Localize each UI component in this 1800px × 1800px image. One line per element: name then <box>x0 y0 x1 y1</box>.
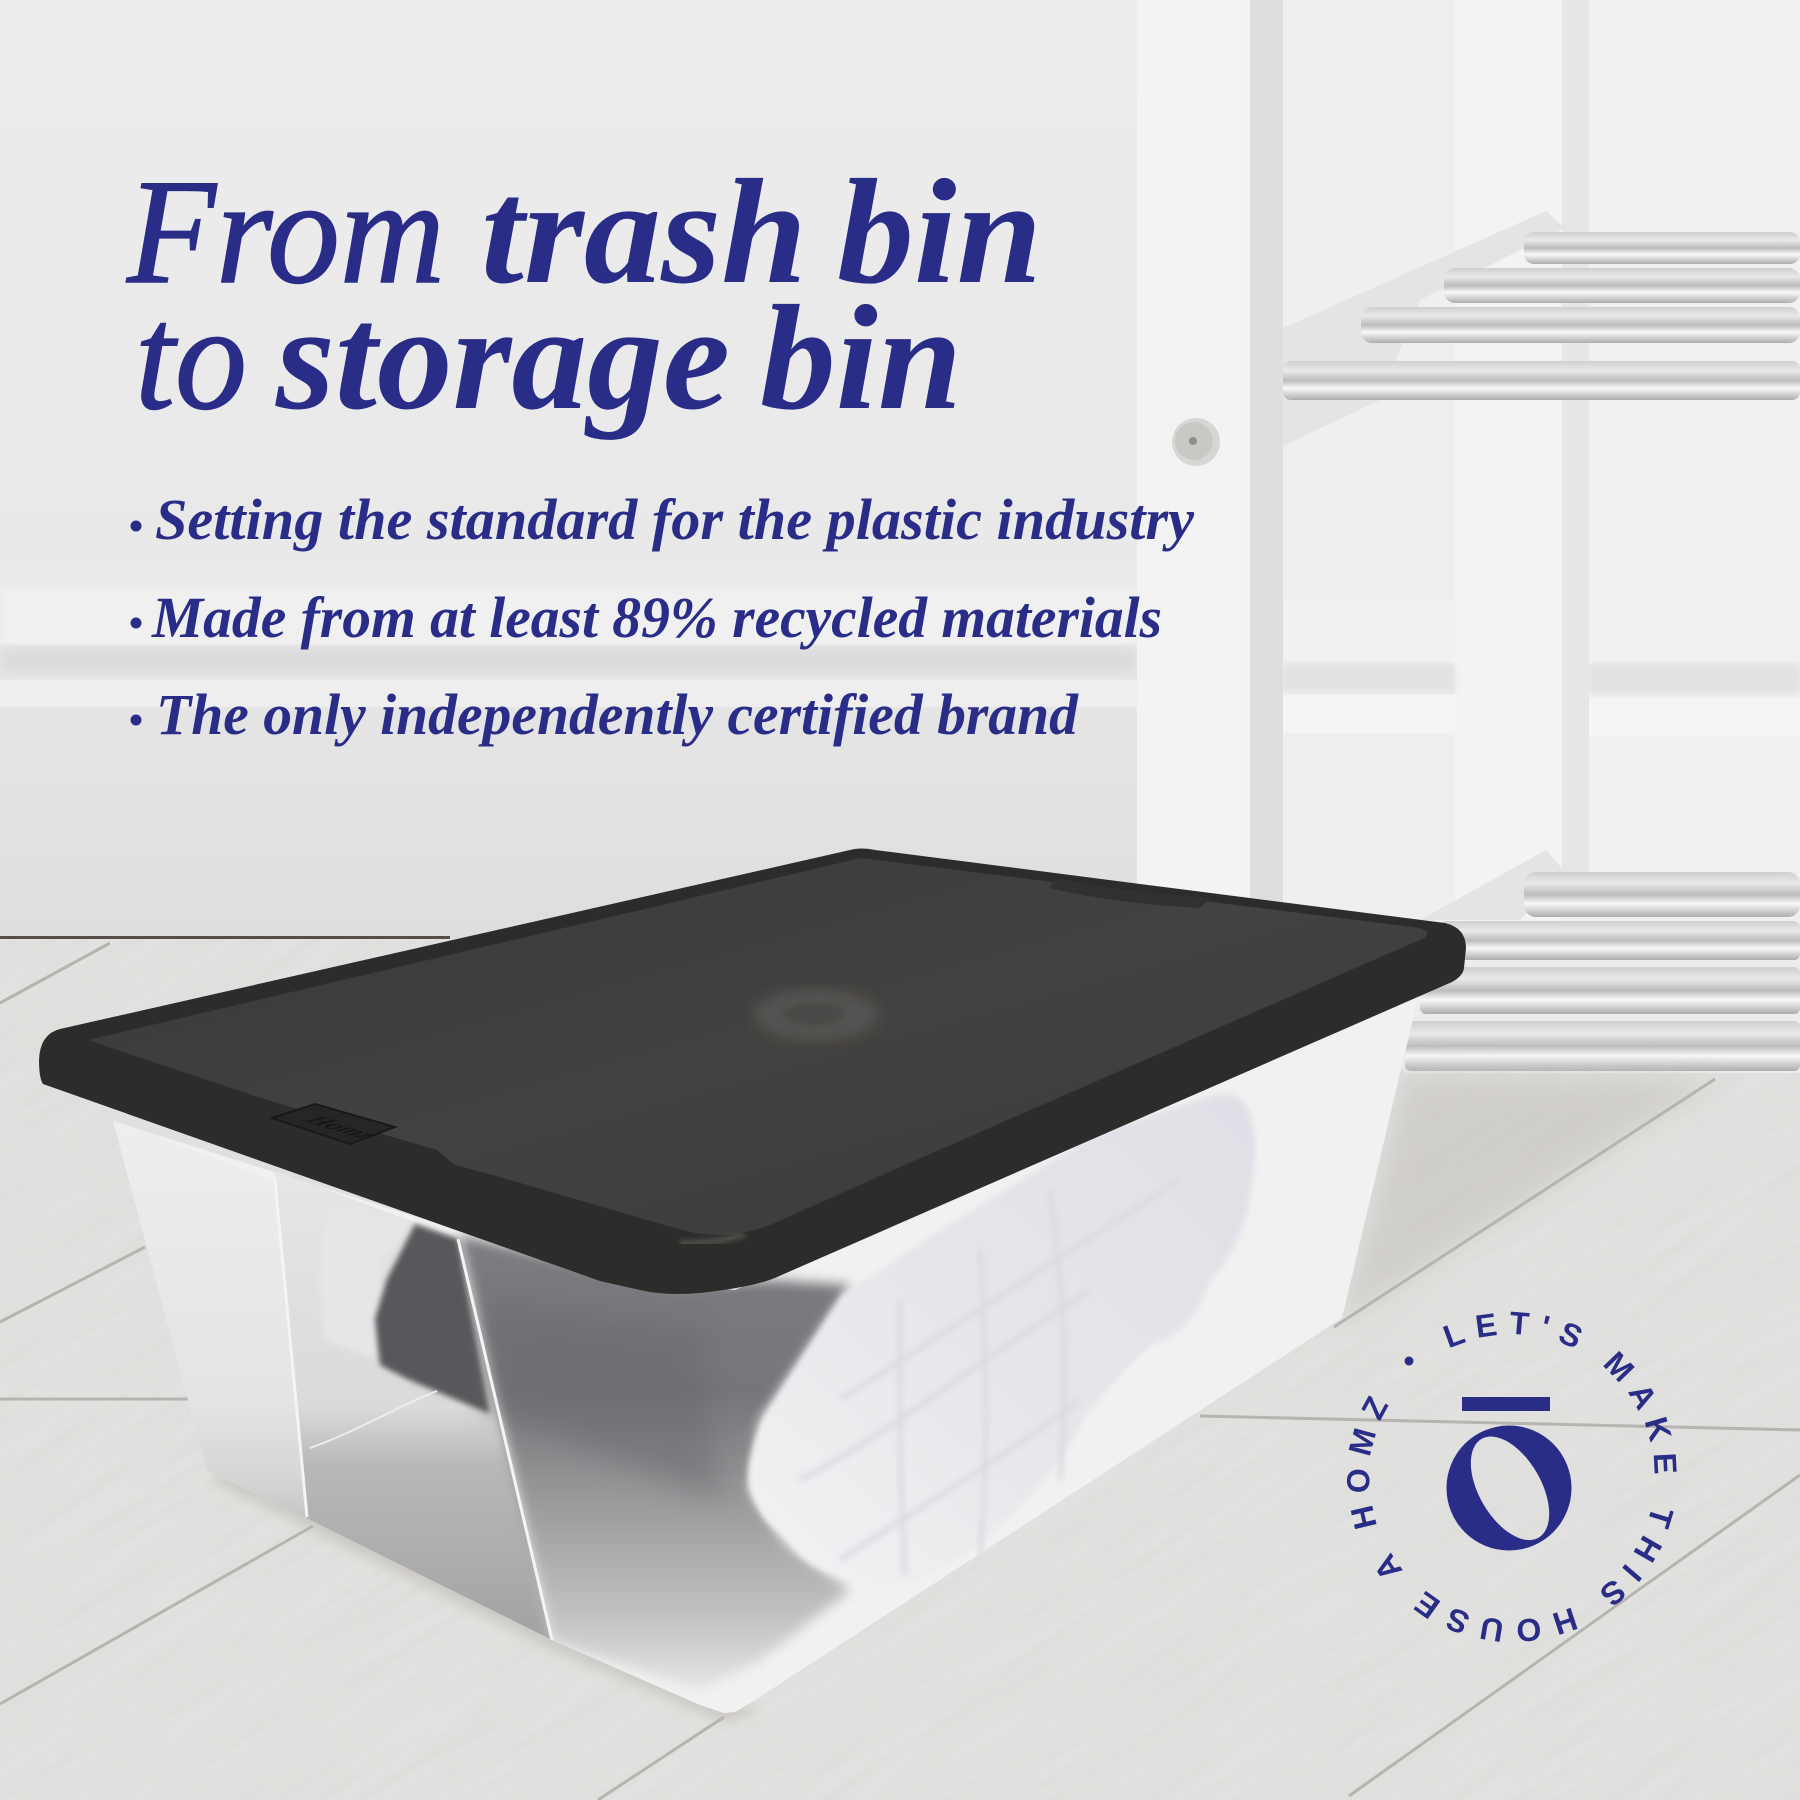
floor wood grain <box>0 939 1800 1800</box>
panel crease <box>310 1391 437 1448</box>
badge circular text: LET'S MAKE THIS HOUSE A HOMZ <box>1346 1312 1677 1642</box>
lid outer rim <box>39 848 1466 1294</box>
title line 2: bin <box>760 275 962 441</box>
front seam line <box>458 1239 552 1640</box>
title line 1 <box>126 149 1042 315</box>
upper shelf brackets and rails <box>1283 211 1800 446</box>
rail 3 <box>1361 307 1800 343</box>
title <box>126 149 1042 441</box>
door moulding <box>0 563 1137 707</box>
lower rail 4 <box>1405 1021 1800 1071</box>
white shoe heel <box>324 1290 375 1356</box>
lid top panel <box>88 858 1427 1235</box>
white shoe sole <box>748 1094 1255 1585</box>
left clear face <box>147 1243 306 1518</box>
wall moulding <box>1283 600 1800 736</box>
lower rail 1 <box>1524 872 1800 917</box>
wall screw <box>1172 418 1220 466</box>
shelf posts <box>1250 0 1589 905</box>
title line 2: storage <box>275 275 730 441</box>
background: white door <box>0 0 1800 945</box>
brand badge <box>1346 1312 1677 1642</box>
door stile <box>1137 0 1251 945</box>
storage bin <box>39 848 1466 1720</box>
shelf unit: back wall <box>1283 0 1800 945</box>
title line 1: trash <box>481 149 807 315</box>
floor shade wedge behind bin <box>1334 1075 1715 1327</box>
lid central hub <box>754 989 878 1041</box>
dark inner panel <box>459 1235 850 1690</box>
brand imprint: Homz <box>296 1113 385 1141</box>
bullet 3: The only independently certified brand <box>156 682 1079 747</box>
bullet 1: Setting the standard for the plastic industry <box>155 487 1194 552</box>
shoe upper shade <box>480 1300 720 1500</box>
wooden floor <box>0 936 1800 1800</box>
brand imprint <box>272 1104 395 1144</box>
door bottom shadow line <box>0 936 450 939</box>
bracket <box>1283 211 1565 446</box>
lower shelf brackets and rails <box>1405 850 1800 1071</box>
lid corner highlight <box>680 1234 745 1243</box>
dark shoe <box>375 1224 490 1414</box>
badge logo ring <box>1447 1426 1572 1550</box>
sole tread pattern <box>801 1257 1068 1574</box>
badge dot <box>1404 1356 1414 1366</box>
rail 4 <box>1283 361 1800 400</box>
lid handle notch <box>1050 878 1210 908</box>
title line 2 <box>135 275 962 441</box>
middle panel <box>275 1170 552 1645</box>
lower rail 3 <box>1420 967 1800 1014</box>
bullet 2: Made from at least 89% recycled materials <box>151 585 1162 650</box>
title line 1: From <box>126 149 445 315</box>
title line 1: bin <box>837 149 1042 315</box>
lower bracket <box>1420 850 1565 920</box>
title line 2: to <box>135 275 247 441</box>
left seam line <box>275 1181 307 1517</box>
lower rail 2 <box>1440 921 1800 960</box>
rail 1 <box>1524 232 1800 264</box>
box shadow on floor <box>207 1470 760 1722</box>
bin body <box>100 990 1430 1720</box>
plank seams <box>0 943 1800 1800</box>
bullet list <box>130 487 1194 747</box>
rail 2 <box>1444 268 1800 303</box>
badge logo bar <box>1462 1397 1550 1411</box>
